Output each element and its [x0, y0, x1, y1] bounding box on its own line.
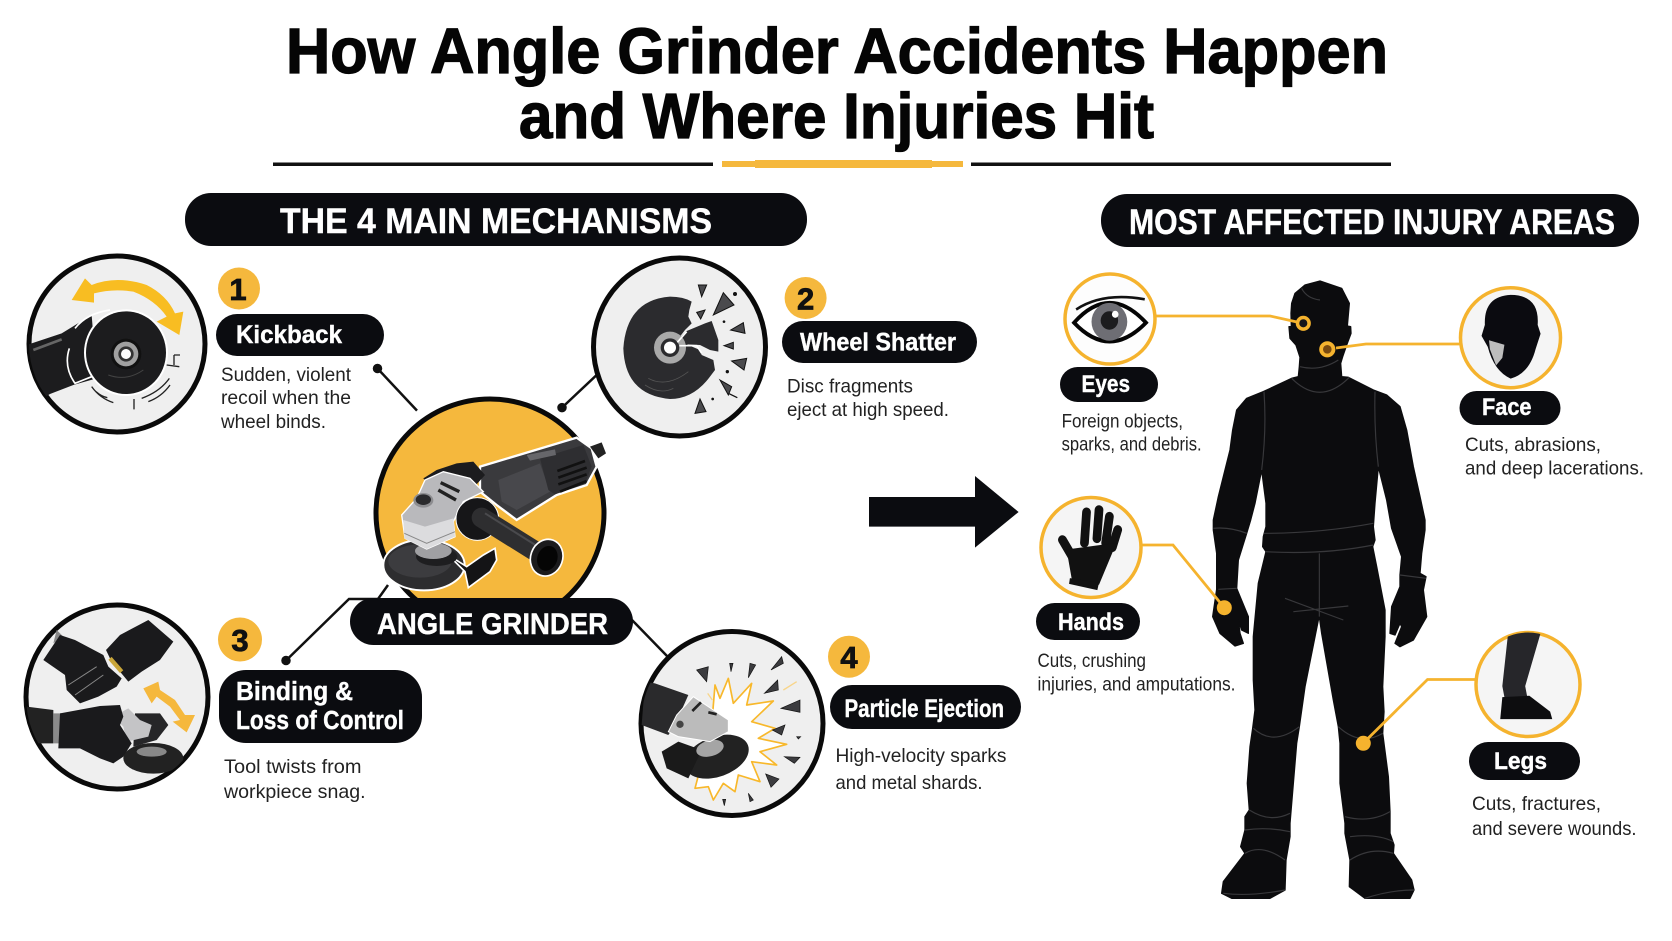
label: legs: Legs — [1494, 748, 1547, 775]
icon: hand — [1041, 498, 1141, 598]
description: kickback: wheel binds. — [220, 411, 326, 433]
panel: most affected injury areas — [1036, 194, 1644, 898]
icon: shattered wheel — [594, 258, 766, 436]
description: hands: Cuts, crushing — [1038, 650, 1146, 672]
label: particle ejection — [830, 685, 1021, 729]
heading: the 4 main mechanisms — [185, 193, 807, 246]
description: particle ejection — [836, 745, 1007, 794]
description: hands — [1038, 650, 1236, 696]
icon: gloved hands on grinder — [26, 605, 208, 789]
badge 1: 1 — [229, 272, 247, 307]
label: wheel shatter: Wheel Shatter — [800, 328, 956, 356]
badge 1 — [218, 268, 260, 310]
description: binding — [223, 756, 366, 803]
badge 4: 4 — [840, 640, 858, 675]
icon: face — [1460, 288, 1560, 388]
label: kickback: Kickback — [236, 321, 342, 349]
label: face — [1460, 391, 1560, 425]
connector: eyes — [1155, 316, 1297, 322]
hub: angle grinder illustration — [350, 399, 633, 645]
badge 3 — [218, 618, 262, 662]
label: binding and loss of control: Binding & — [236, 678, 353, 706]
description: binding: workpiece snag. — [223, 781, 366, 803]
badge 2 — [785, 277, 827, 319]
connector: hands — [1141, 545, 1224, 607]
badge 4 — [828, 636, 870, 678]
connector: legs — [1363, 680, 1475, 743]
description: wheel shatter: Disc fragments — [787, 376, 913, 398]
description: legs: Cuts, fractures, — [1472, 793, 1601, 815]
description: particle ejection: High-velocity sparks — [836, 745, 1007, 767]
mechanism 1: kickback — [27, 256, 384, 433]
icon: sparks and shards — [641, 632, 823, 816]
label: angle grinder: ANGLE GRINDER — [377, 608, 608, 641]
description: face — [1465, 434, 1644, 480]
description: binding: Tool twists from — [224, 756, 362, 778]
label: eyes: Eyes — [1082, 371, 1130, 398]
label: particle ejection: Particle Ejection — [844, 695, 1004, 723]
mechanism 4: particle ejection — [641, 632, 1021, 816]
marker: face — [1321, 343, 1334, 355]
connector: face — [1336, 344, 1460, 348]
badge 3: 3 — [231, 623, 249, 658]
description: legs — [1472, 793, 1636, 840]
heading: the 4 main mechanisms: THE 4 MAIN MECHANISMS — [280, 202, 712, 241]
marker: eyes — [1298, 318, 1309, 329]
description: eyes: sparks, and debris. — [1062, 433, 1202, 455]
description: wheel shatter: eject at high speed. — [787, 399, 949, 421]
callout: face — [1321, 288, 1644, 480]
description: eyes: Foreign objects, — [1062, 410, 1183, 432]
label: hands — [1036, 603, 1140, 640]
title: How Angle Grinder Accidents Happen — [286, 15, 1388, 87]
description: kickback — [220, 364, 352, 433]
heading: most affected injury areas — [1101, 194, 1639, 247]
label: kickback — [216, 314, 384, 356]
arrow: mechanisms to injury areas — [869, 476, 1019, 548]
panel: the 4 main mechanisms — [26, 193, 1021, 816]
label: wheel shatter — [782, 321, 977, 363]
description: wheel shatter — [787, 376, 949, 421]
icon: kickback disc — [27, 256, 205, 432]
callout: legs — [1356, 629, 1636, 840]
label: hands: Hands — [1058, 609, 1124, 636]
icon: eye — [1065, 274, 1155, 364]
callout: eyes — [1060, 274, 1309, 455]
mechanism 3: binding and loss of control — [26, 605, 422, 803]
description: particle ejection: and metal shards. — [836, 772, 982, 794]
description: eyes — [1062, 410, 1202, 455]
description: kickback: Sudden, violent — [221, 364, 352, 386]
label: eyes — [1060, 367, 1158, 402]
mechanism 2: wheel shatter — [594, 258, 977, 436]
callout: hands — [1036, 498, 1236, 696]
marker: hands — [1217, 600, 1232, 615]
marker: legs — [1356, 736, 1371, 751]
badge 2: 2 — [797, 282, 814, 316]
label: face: Face — [1482, 394, 1532, 421]
icon: leg — [1476, 629, 1580, 736]
label: binding and loss of control: Loss of Control — [236, 707, 404, 735]
label: binding and loss of control — [219, 670, 422, 743]
description: face: and deep lacerations. — [1465, 458, 1644, 480]
icon: angle grinder — [383, 438, 606, 590]
label: angle grinder — [350, 598, 633, 645]
connector lines to hub — [282, 365, 667, 664]
description: kickback: recoil when the — [221, 387, 351, 409]
description: hands: injuries, and amputations. — [1038, 674, 1236, 696]
title: and Where Injuries Hit — [519, 80, 1154, 152]
description: face: Cuts, abrasions, — [1465, 434, 1601, 456]
figure: human silhouette — [1213, 281, 1427, 898]
description: legs: and severe wounds. — [1472, 818, 1636, 840]
label: legs — [1469, 742, 1580, 780]
title — [286, 15, 1388, 152]
